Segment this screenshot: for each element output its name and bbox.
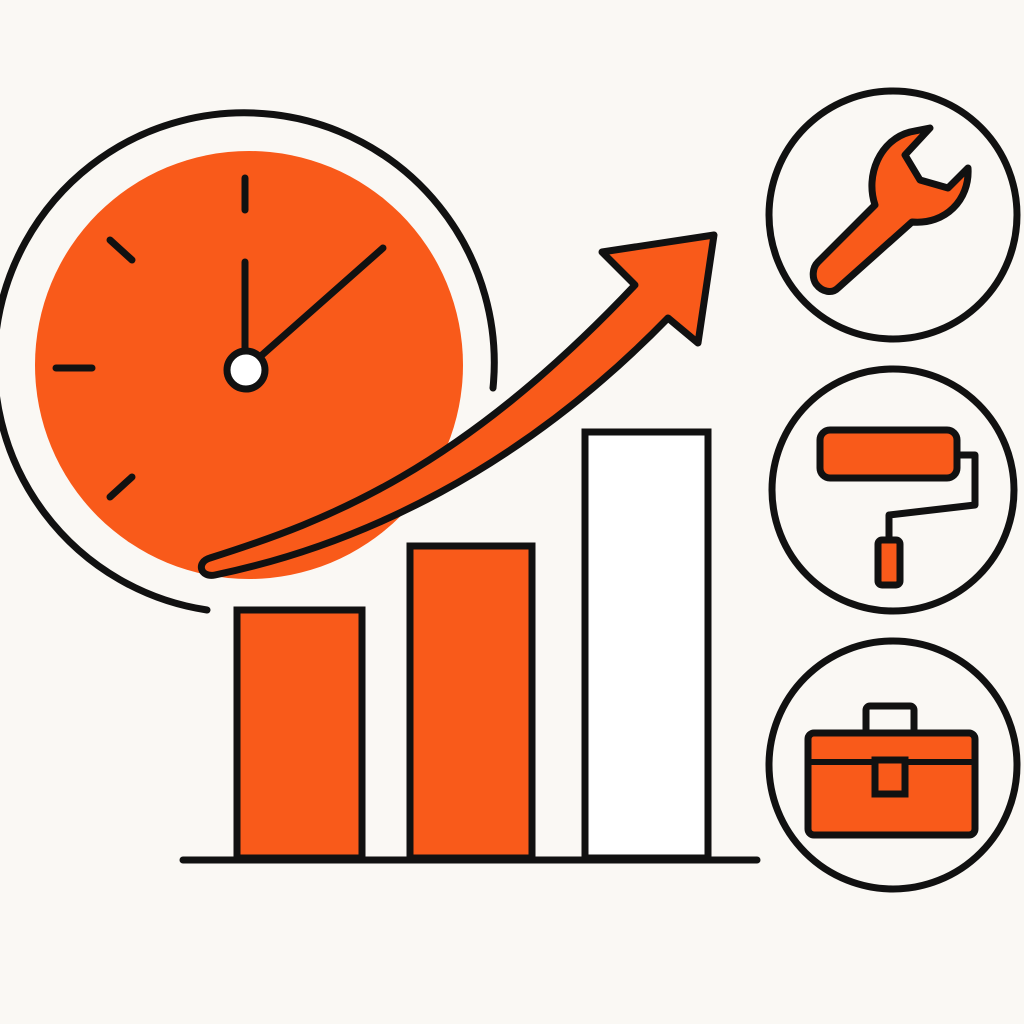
clock	[0, 113, 494, 610]
clock outer arc	[0, 113, 494, 610]
icon: wrench	[813, 128, 968, 291]
bar chart	[183, 432, 757, 860]
icon circle: wrench	[769, 91, 1017, 339]
clock hands	[245, 248, 383, 355]
clock face	[35, 151, 463, 579]
clock ticks	[56, 178, 245, 497]
clock center	[227, 351, 265, 389]
icon: paint roller	[820, 430, 957, 478]
icon circle: paint roller	[772, 369, 1014, 611]
arrow	[201, 235, 714, 575]
icon: toolbox	[866, 706, 914, 734]
icon circle: toolbox	[769, 641, 1017, 889]
